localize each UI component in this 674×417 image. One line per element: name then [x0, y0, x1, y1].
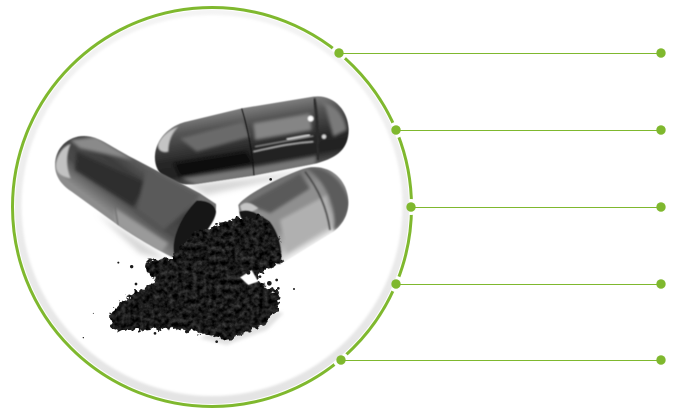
green outer ring: [12, 8, 412, 406]
white disc: [22, 15, 402, 396]
capsule: left: [55, 136, 216, 259]
connector 5: [336, 355, 666, 365]
powder glow: [200, 310, 283, 345]
connector 4: [391, 279, 666, 289]
powder pile: [83, 178, 295, 345]
connector 3: [406, 202, 666, 212]
connector 2: [391, 125, 666, 135]
panel: circle frame: [12, 8, 419, 406]
powder white gaps: [240, 270, 272, 286]
powder crumbs: [83, 178, 295, 343]
capsule shadows: [97, 168, 313, 260]
capsule: right half: [238, 167, 350, 267]
capsule: back: [155, 96, 349, 185]
grey inner ring: [15, 10, 409, 404]
photo: charcoal capsules and powder: [55, 96, 350, 345]
ring gaps around dots: [331, 45, 419, 368]
connector 1: [334, 48, 666, 58]
